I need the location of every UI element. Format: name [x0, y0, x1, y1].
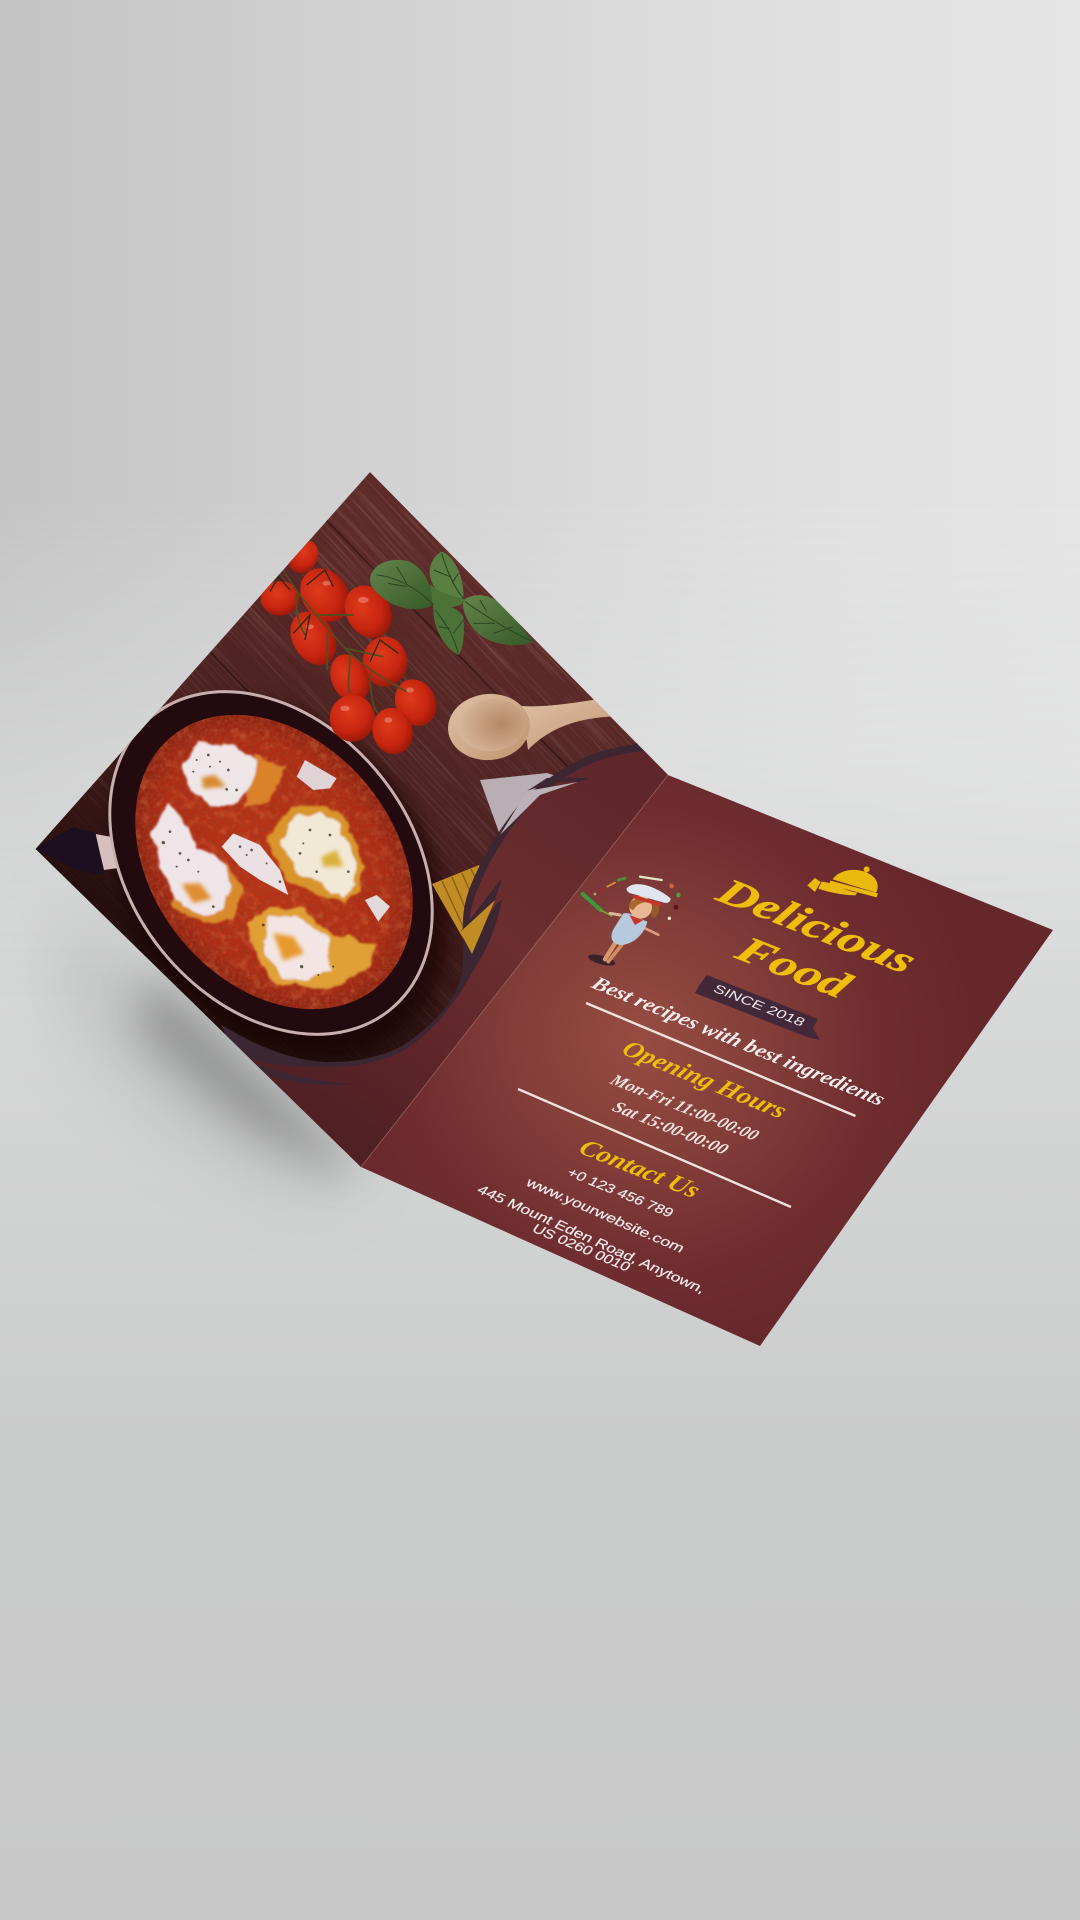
pan [108, 690, 434, 1036]
basil leaves [370, 552, 534, 655]
maroon wave: fill [249, 751, 668, 1167]
contact details: US 0260 0010 [529, 1222, 633, 1275]
shadow under brochure [60, 900, 361, 1190]
wooden table [36, 472, 668, 1167]
title: Delicious Food: Food [726, 929, 861, 1007]
shakshuka sauce [135, 714, 413, 1010]
opening hours times: Mon-Fri 11:00-00:00 [605, 1072, 762, 1144]
wave spikes and notches [240, 778, 590, 1085]
contact details: 445 Mount Eden Road, Anytown, [474, 1183, 708, 1297]
title: Delicious Food: Delicious [707, 871, 925, 981]
fold crease [361, 775, 668, 1167]
pan handle [36, 827, 118, 875]
icon: hand with cloche [807, 866, 878, 897]
eggs [152, 742, 390, 988]
divider line 2 [518, 1089, 791, 1207]
opening hours times: Sat 15:00-00:00 [608, 1099, 732, 1158]
opening hours heading: Opening Hours [617, 1035, 793, 1123]
cherry tomatoes [261, 535, 444, 759]
pan shadow [106, 692, 454, 1052]
brochure left panel: food photo [36, 472, 668, 1167]
divider line 1 [586, 1003, 856, 1116]
tagline: Best recipes with best ingredients [586, 972, 890, 1110]
spaghetti [432, 865, 480, 938]
title: Delicious Food [707, 871, 925, 1007]
contact details: +0 123 456 789 [564, 1166, 676, 1220]
brochure right panel [361, 775, 1053, 1346]
maroon wave: dark outline [222, 742, 668, 1148]
contact details: www.yourwebsite.com [522, 1176, 687, 1256]
napkin [480, 773, 554, 832]
icon: chef juggling vegetables [583, 877, 681, 968]
ribbon: since 2018 [695, 975, 820, 1040]
contact heading: Contact Us [574, 1134, 706, 1203]
ribbon: since 2018: SINCE 2018 [710, 981, 809, 1029]
wooden spoon [448, 694, 610, 760]
